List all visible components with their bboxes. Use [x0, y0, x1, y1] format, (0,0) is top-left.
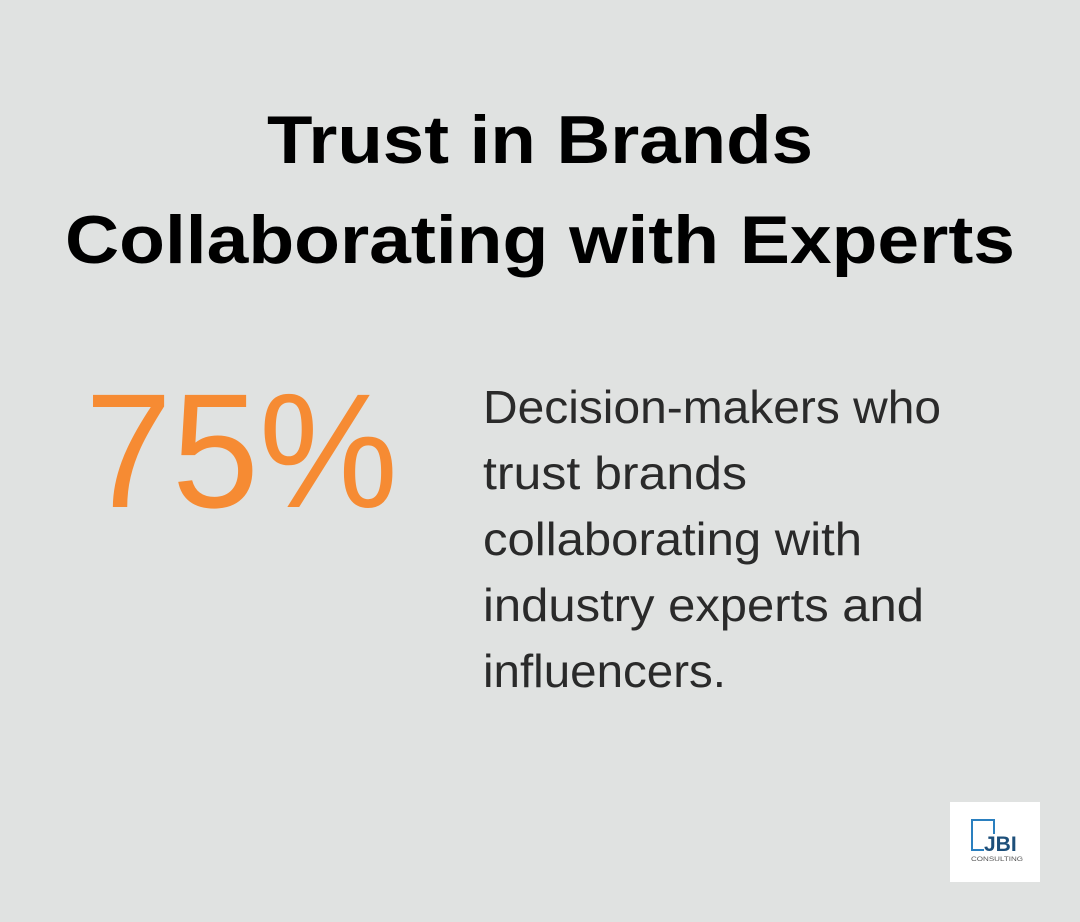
description text: Decision-makers who [483, 381, 941, 433]
description text: influencers. [483, 645, 726, 697]
title: Trust in Brands [267, 102, 813, 178]
big stat: 75%: 75% [85, 359, 398, 542]
logo: JBI Consulting: JBI [984, 833, 1017, 856]
title [65, 102, 1015, 278]
description text: industry experts and [483, 579, 924, 631]
description text [483, 381, 941, 697]
logo: JBI Consulting: CONSULTING [971, 857, 1023, 863]
title: Collaborating with Experts [65, 202, 1015, 278]
description text: trust brands [483, 447, 747, 499]
logo: JBI Consulting [950, 802, 1040, 882]
description text: collaborating with [483, 513, 862, 565]
